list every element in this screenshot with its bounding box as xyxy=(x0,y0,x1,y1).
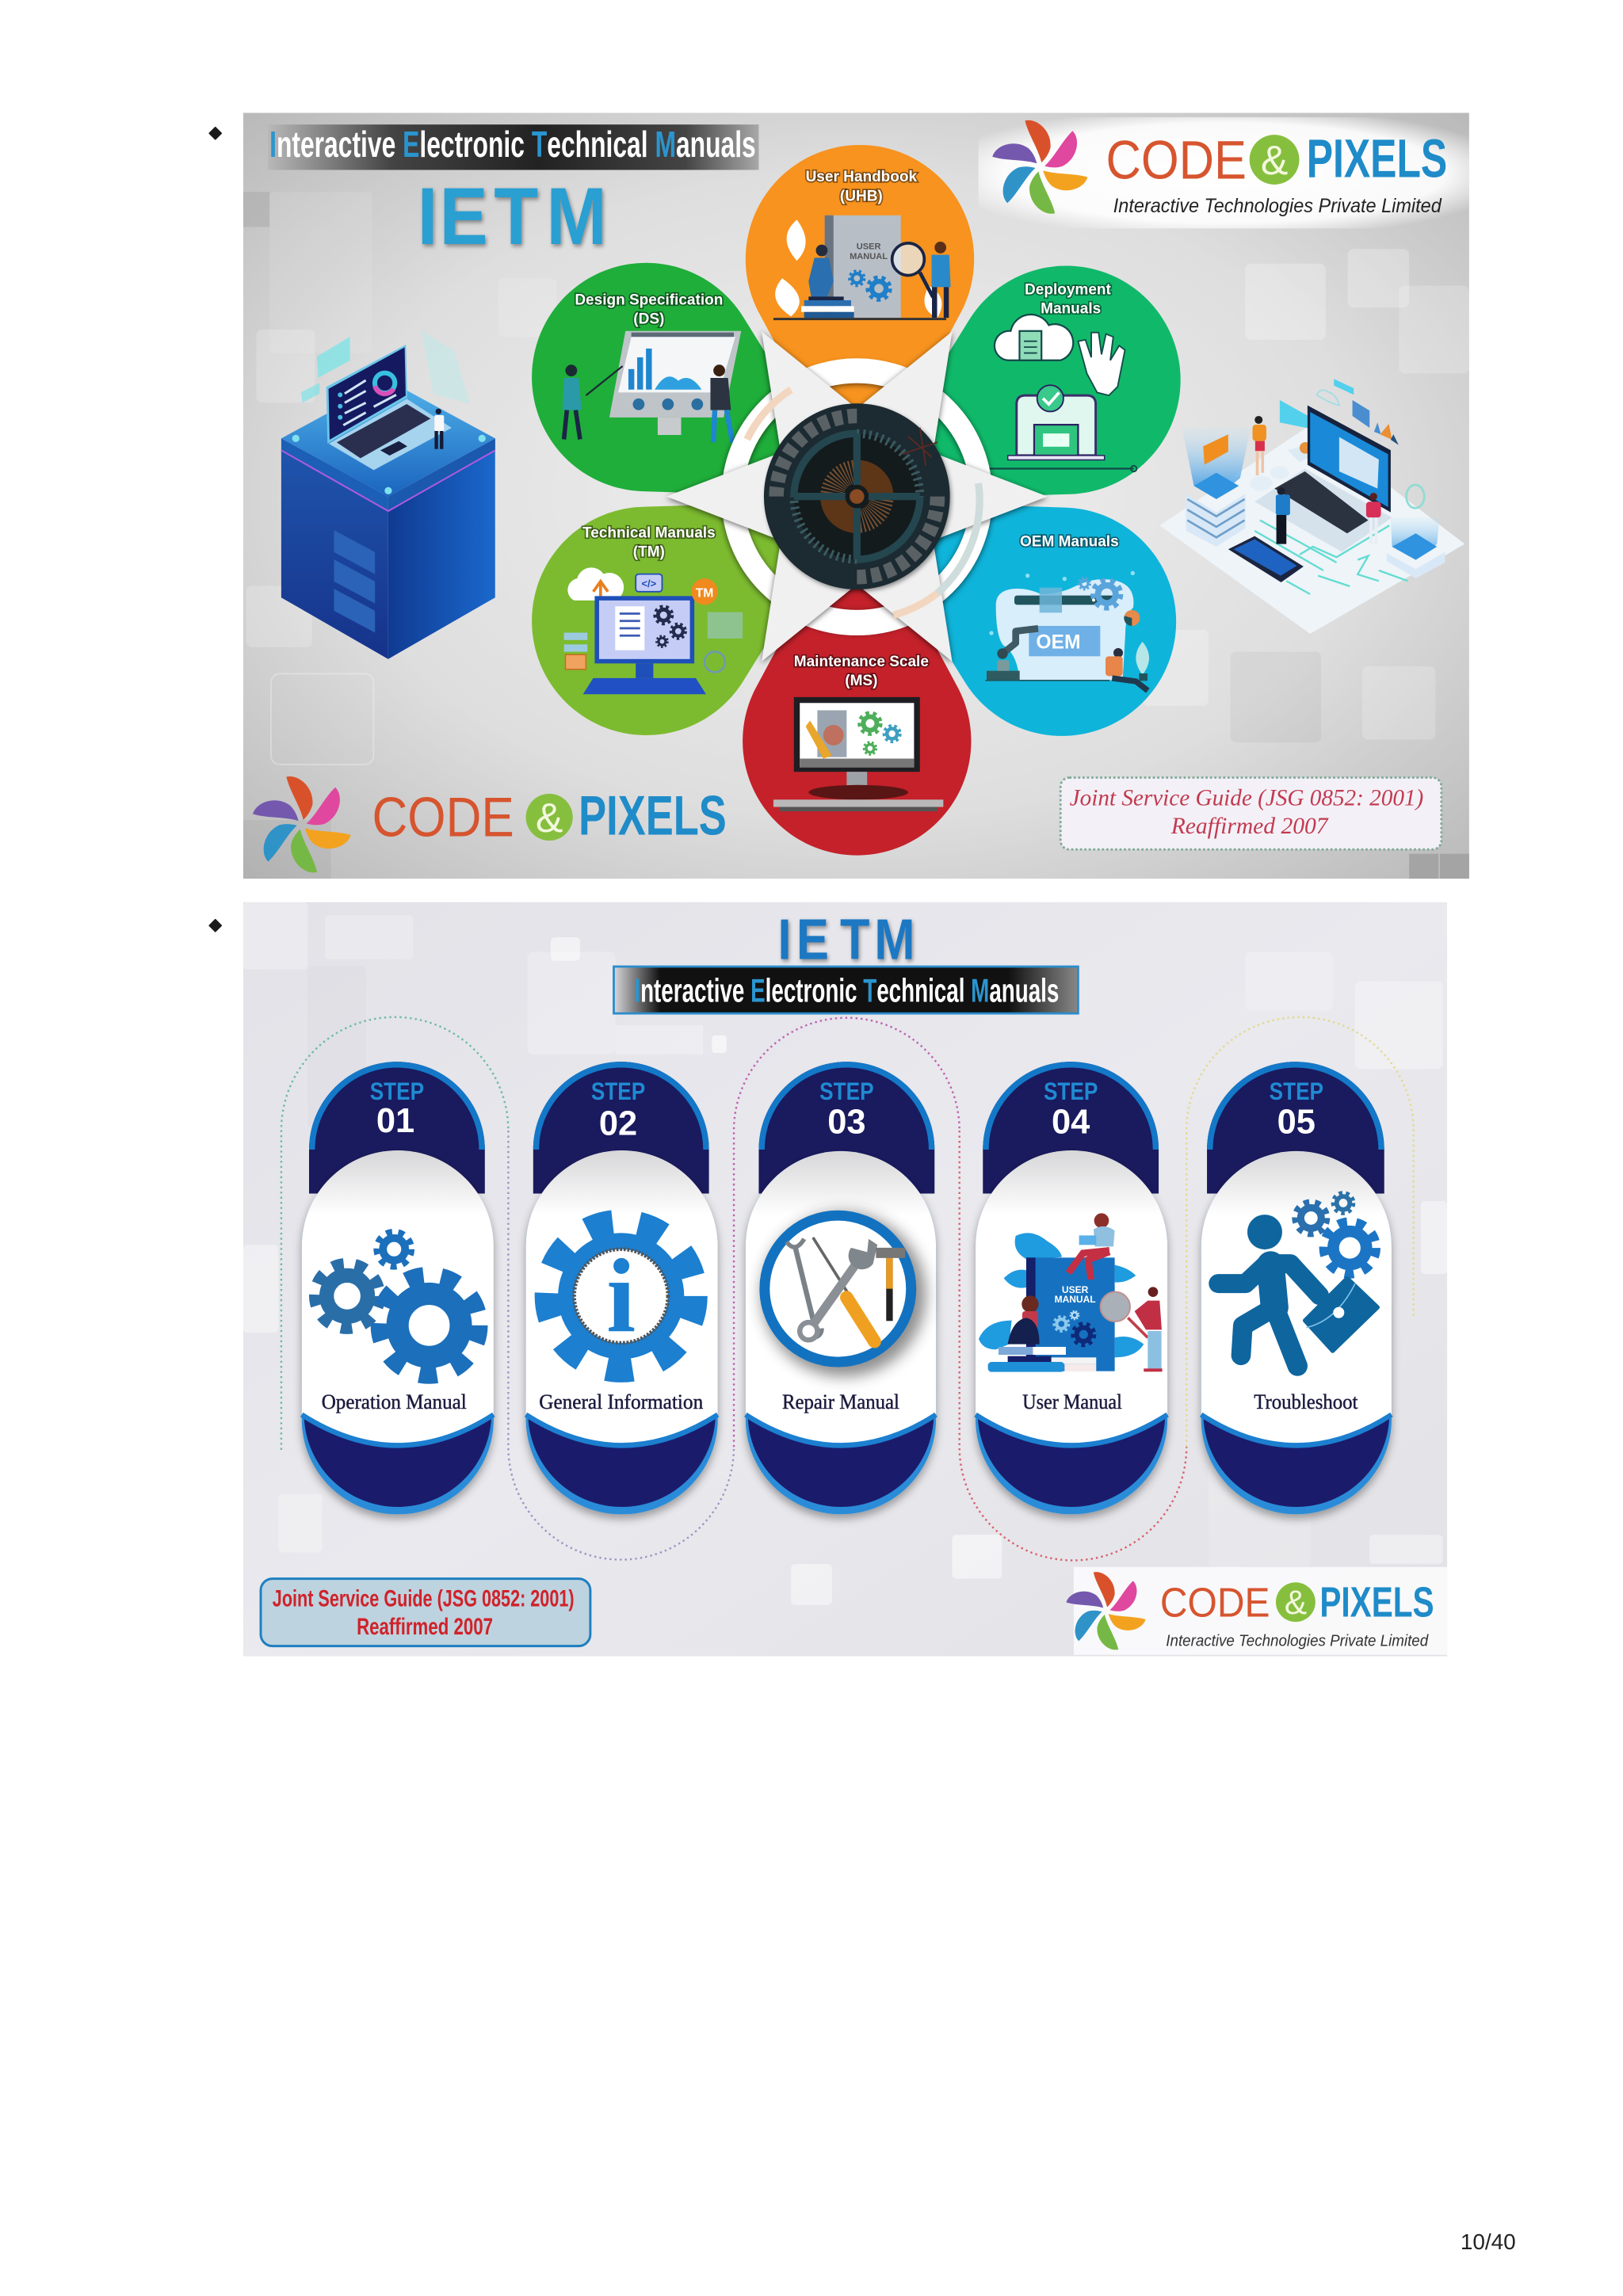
icon: user manual with readers: USER xyxy=(1062,1284,1089,1295)
dotted serpentine connector xyxy=(281,1017,1414,1561)
callout: Joint Service Guide: Joint Service Guide (JSG 0852: 2001) xyxy=(1070,786,1423,811)
Code & Pixels logo: bottom left xyxy=(252,776,727,872)
panel: IETM document types slide xyxy=(243,113,1471,879)
cube top with laptop xyxy=(281,330,495,511)
heading xyxy=(582,524,716,560)
icon: gears xyxy=(315,1232,479,1375)
dome: STEP xyxy=(591,1077,645,1105)
dome: 02 xyxy=(599,1105,637,1143)
capsule xyxy=(746,1151,936,1514)
step 4: User Manual xyxy=(976,1062,1167,1514)
icon: user manual with readers: MANUAL xyxy=(1055,1294,1096,1305)
Code & Pixels logo: bottom left: & xyxy=(536,795,563,841)
IETM logo: IETM xyxy=(418,171,607,261)
heading xyxy=(575,292,723,328)
label: User Manual xyxy=(1022,1390,1122,1413)
petal: User Handbook xyxy=(745,145,975,404)
dome: 05 xyxy=(1277,1104,1316,1142)
dome: STEP xyxy=(370,1077,424,1105)
icon: running man with gears and briefcase xyxy=(1218,1193,1377,1366)
title banner: Interactive Electronic Technical Manuals xyxy=(269,124,756,165)
phone xyxy=(1228,536,1304,582)
dome: STEP xyxy=(1044,1077,1098,1105)
Code & Pixels logo: top right: CODE xyxy=(1106,131,1247,191)
icon: user manual book with readers xyxy=(773,215,951,320)
title banner: Interactive Electronic Technical Manuals xyxy=(634,971,1059,1009)
floating screens xyxy=(1280,379,1399,462)
dome: 03 xyxy=(827,1104,866,1142)
icon: information gear xyxy=(548,1223,693,1368)
icon: presentation monitor xyxy=(563,331,741,442)
heading: Manuals xyxy=(1041,301,1101,318)
heading: Deployment xyxy=(1025,282,1112,299)
capsule xyxy=(1201,1151,1392,1514)
Code & Pixels logo: bottom right: Interactive Technologies Private Limited xyxy=(1166,1633,1429,1650)
icon: information gear: i xyxy=(606,1237,636,1354)
step 2: General Information xyxy=(526,1062,718,1514)
page number: 10/40 xyxy=(1461,2229,1516,2254)
dome: 04 xyxy=(1052,1104,1090,1142)
icon: user manual book with readers: USER xyxy=(857,242,880,251)
dome xyxy=(533,1062,709,1193)
IETM logo: IETM xyxy=(777,908,915,972)
heading: (DS) xyxy=(633,311,664,328)
heading: User Handbook xyxy=(806,169,918,185)
heading: (UHB) xyxy=(840,188,883,204)
hub: dark radial disc xyxy=(764,403,950,589)
Code & Pixels logo: bottom left: CODE xyxy=(372,785,514,848)
circuit lines xyxy=(1254,521,1408,594)
petal: Maintenance Scale xyxy=(743,589,972,856)
label: Troubleshoot xyxy=(1254,1390,1358,1413)
woman on pedestal xyxy=(1251,416,1289,490)
callout: Joint Service Guide: Joint Service Guide (JSG 0852: 2001) xyxy=(273,1586,575,1612)
heading: Technical Manuals xyxy=(582,524,716,541)
petal: OEM Manuals xyxy=(934,505,1176,736)
dome xyxy=(758,1062,934,1193)
callout: Joint Service Guide xyxy=(1060,778,1442,849)
illustration: server cube with laptop xyxy=(281,330,495,659)
icon: OEM window with robot arm xyxy=(985,571,1149,691)
icon: tools badge xyxy=(762,1213,926,1377)
icon: OEM window with robot arm: OEM xyxy=(1036,631,1081,653)
hub: white ring and star xyxy=(666,332,1048,662)
step 5: Troubleshoot xyxy=(1201,1062,1392,1514)
step 1: Operation Manual xyxy=(302,1062,494,1514)
heading: Design Specification xyxy=(575,292,723,309)
petal: Design Specification xyxy=(490,221,913,597)
icon: computer with TM badge xyxy=(564,567,743,694)
Code & Pixels logo: top right xyxy=(979,117,1471,228)
petal: Technical Manuals xyxy=(490,401,913,777)
Code & Pixels logo: bottom right: & xyxy=(1285,1585,1307,1622)
illustration: isometric laptop platform xyxy=(1159,379,1465,634)
background square pattern xyxy=(243,192,1469,879)
Code & Pixels logo: bottom right xyxy=(1066,1567,1449,1655)
Code & Pixels logo: bottom right: PIXELS xyxy=(1319,1579,1434,1627)
capsule xyxy=(302,1150,494,1514)
dome: STEP xyxy=(819,1077,874,1105)
heading: Maintenance Scale xyxy=(794,654,929,670)
Code & Pixels logo: bottom left: PIXELS xyxy=(579,784,727,847)
callout: Joint Service Guide: Reaffirmed 2007 xyxy=(1170,814,1329,839)
bullet: first slide xyxy=(209,128,221,139)
capsule xyxy=(526,1150,718,1514)
label: Repair Manual xyxy=(782,1390,899,1413)
Code & Pixels logo: bottom right: CODE xyxy=(1160,1580,1270,1626)
icon: computer with TM badge: TM xyxy=(696,586,713,600)
dome: 01 xyxy=(376,1102,414,1140)
white platform xyxy=(1159,425,1465,634)
dome xyxy=(309,1062,485,1193)
heading xyxy=(1025,282,1112,318)
man and girl figures xyxy=(1276,487,1381,544)
icon: user manual with readers xyxy=(979,1213,1163,1372)
dome: STEP xyxy=(1270,1077,1323,1105)
dome xyxy=(1207,1062,1384,1193)
background square pattern xyxy=(243,902,1447,1605)
heading: OEM Manuals xyxy=(1020,534,1119,551)
callout: Joint Service Guide: Reaffirmed 2007 xyxy=(357,1614,493,1640)
capsule xyxy=(976,1150,1167,1514)
petal: Deployment Manuals xyxy=(934,266,1181,495)
left server with hologram xyxy=(1182,428,1251,547)
cube faces xyxy=(281,450,495,659)
callout: Joint Service Guide xyxy=(261,1579,590,1646)
bullet: second slide xyxy=(209,920,221,932)
label: General Information xyxy=(539,1390,703,1413)
label: Operation Manual xyxy=(322,1390,467,1413)
icon: cloud, hand and laptop xyxy=(989,315,1136,471)
heading xyxy=(806,169,918,204)
heading: (TM) xyxy=(633,543,665,560)
laptop xyxy=(1254,406,1392,552)
icon: monitor with gears on desk xyxy=(773,697,943,811)
heading xyxy=(794,654,929,689)
icon: user manual book with readers: MANUAL xyxy=(850,252,888,261)
dome xyxy=(983,1062,1159,1193)
Code & Pixels logo: top right: PIXELS xyxy=(1307,129,1447,189)
heading: (MS) xyxy=(845,673,877,689)
panel: IETM five steps slide xyxy=(243,902,1449,1657)
step 3: Repair Manual xyxy=(746,1062,936,1514)
Code & Pixels logo: top right: Interactive Technologies Private Limited xyxy=(1113,195,1442,217)
Code & Pixels logo: top right: & xyxy=(1261,137,1288,183)
right server with hologram xyxy=(1387,485,1445,578)
icon: computer with TM badge: </> xyxy=(641,578,657,589)
